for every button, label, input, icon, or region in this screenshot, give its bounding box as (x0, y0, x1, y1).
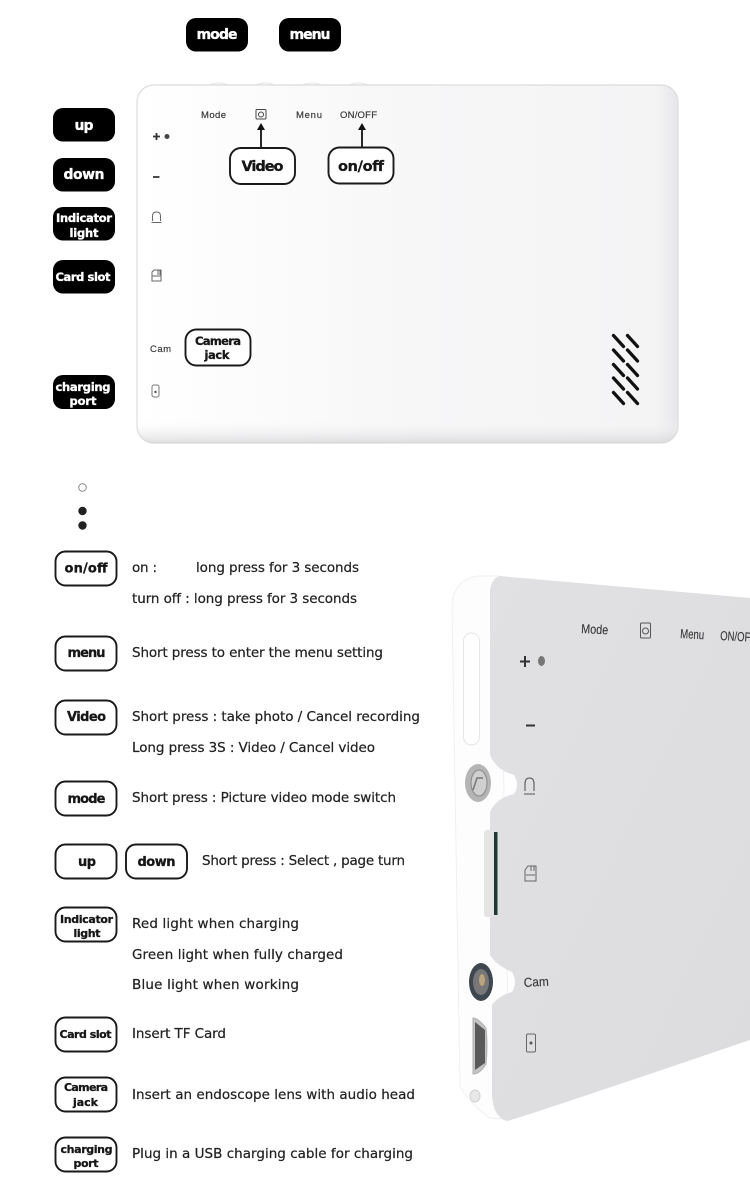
row: indicator light: Red light when charging (132, 916, 299, 932)
callout: video (230, 148, 295, 184)
row: up and down: up (78, 855, 96, 870)
device: front view diagram (137, 83, 678, 443)
side label: charging port: port (70, 394, 97, 408)
usb port (473, 1018, 487, 1074)
row: menu (56, 636, 383, 670)
row: charging port: charging (60, 1143, 112, 1156)
row: on/off: long press for 3 seconds (196, 560, 359, 576)
top label: mode: mode (196, 27, 238, 43)
device body (137, 85, 678, 443)
device: angled side view photo (452, 576, 750, 1121)
row: camera jack: Camera (64, 1081, 108, 1094)
side label: indicator light (53, 207, 115, 240)
row: mode: Short press : Picture video mode switch (132, 790, 396, 806)
row: camera jack: jack (72, 1096, 99, 1109)
row: indicator light: light (74, 927, 100, 940)
side label: indicator light: Indicator (56, 211, 112, 225)
device print labels: Mode (201, 110, 226, 121)
side label: charging port (53, 375, 115, 409)
device print labels: ON/OFF (340, 110, 377, 121)
row: mode: mode (68, 792, 106, 807)
side label: down (53, 158, 115, 192)
status dots (78, 484, 87, 530)
row: video: Short press : take photo / Cancel recording (132, 709, 420, 725)
row: mode (56, 782, 396, 816)
device print labels: Cam (150, 344, 171, 355)
top label: menu (279, 18, 341, 52)
side label: up: up (74, 118, 94, 134)
side label: up (53, 108, 115, 142)
row: charging port: port (74, 1157, 98, 1170)
row: menu: Short press to enter the menu setting (132, 645, 383, 661)
row: video (56, 700, 420, 756)
row: card slot: Insert TF Card (132, 1026, 226, 1042)
top label: mode (186, 18, 248, 52)
row: charging port (56, 1138, 413, 1172)
row: on/off: on/off (64, 562, 108, 576)
side label: card slot: Card slot (56, 270, 111, 284)
top label: menu: menu (290, 27, 330, 43)
side label: down: down (64, 167, 104, 183)
callout: camera jack: jack (204, 348, 230, 362)
row: indicator light: Indicator (60, 913, 114, 926)
face print labels: Menu (680, 626, 705, 642)
arrow: on/off (358, 123, 366, 147)
row: up and down: down (138, 855, 176, 870)
row: on/off: turn off : long press for 3 seconds (132, 591, 357, 607)
row: video: Video (67, 710, 106, 725)
row: up and down (56, 844, 405, 878)
callout: camera jack: Camera (195, 334, 241, 348)
callout: on/off (328, 148, 394, 184)
camera jack (469, 963, 493, 1001)
row: indicator light: Blue light when working (132, 977, 299, 993)
callout: video: Video (242, 159, 284, 175)
callout: on/off: on/off (338, 159, 384, 175)
indicator lens (465, 764, 491, 802)
row: video: Long press 3S : Video / Cancel video (132, 740, 375, 756)
device print labels (150, 110, 377, 397)
card slot (484, 830, 498, 917)
row: indicator light: Green light when fully charged (132, 947, 343, 963)
speaker grille (614, 336, 638, 404)
row: charging port: Plug in a USB charging cable for charging (132, 1146, 413, 1162)
row: on/off: on : (132, 560, 157, 576)
volume button (464, 633, 480, 745)
vent hole (470, 1090, 480, 1102)
row: on/off (56, 552, 359, 607)
face print labels (520, 621, 750, 1052)
device face (490, 576, 750, 1121)
row: camera jack (56, 1078, 415, 1112)
side bezel (452, 576, 510, 1120)
row: card slot: Card slot (60, 1028, 112, 1041)
row: up and down: Short press : Select , page turn (202, 853, 405, 869)
face print labels: Cam (523, 974, 549, 990)
row: menu: menu (68, 646, 106, 661)
row: indicator light (56, 908, 343, 993)
device print labels: Menu (296, 110, 322, 121)
face print labels: Mode (581, 621, 609, 637)
arrow: video (257, 123, 265, 148)
row: camera jack: Insert an endoscope lens with audio head (132, 1087, 415, 1103)
callout: camera jack (186, 330, 250, 366)
side label: card slot (53, 260, 115, 294)
side label: charging port: charging (56, 380, 110, 394)
row: card slot (56, 1018, 226, 1052)
device top buttons (208, 83, 370, 86)
side label: indicator light: light (70, 226, 99, 240)
